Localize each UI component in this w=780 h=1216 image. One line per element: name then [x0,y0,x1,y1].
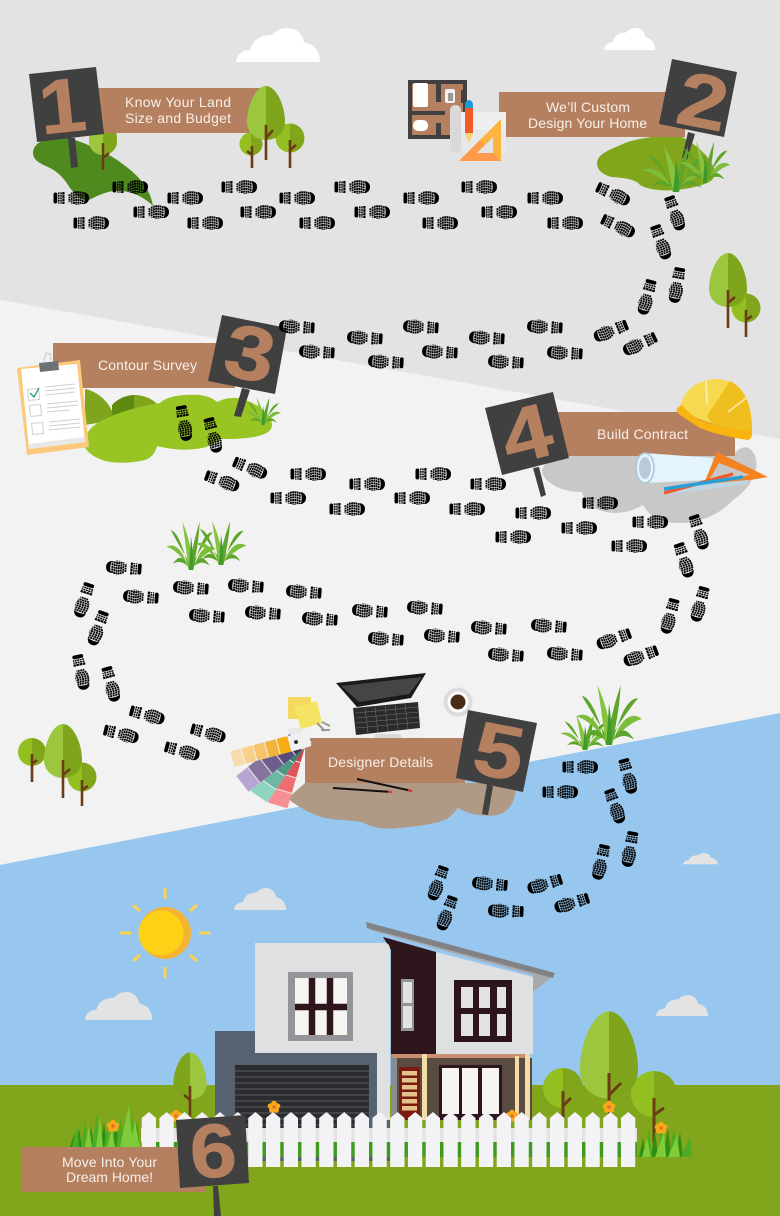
background: lawn [0,1085,780,1216]
sign 1: 1 [35,61,90,151]
grass tufts [642,142,730,192]
narrow window [401,979,414,1031]
grey ground blob 4 [542,447,756,523]
flowers behind fence [170,1101,615,1122]
left window [288,972,353,1041]
step 5 group [230,673,537,829]
brown ground blob 5 [288,783,516,829]
icon: floor plan [408,80,467,139]
right wall [436,952,533,1054]
sign post 6 [213,1186,221,1216]
tree cluster [240,86,304,168]
icon: colour swatch fan [230,726,312,808]
icon: set square and pencils [663,452,768,495]
text: step 1 title: Know Your Land [125,94,231,110]
icon: drawing tools [450,100,506,161]
footprint trail [55,180,711,932]
picket fence [141,1112,637,1167]
sign post 5 [482,784,493,815]
right window [454,980,512,1042]
text: step 2 title: We’ll Custom [546,99,630,115]
green ground blob 2 [597,136,715,190]
icon: pencils [333,779,412,792]
banner 6 [22,1147,205,1192]
banner 3 [53,343,235,388]
garage door [235,1065,369,1155]
step 3 group [17,307,287,463]
text: step 4 title: Build Contract [597,426,688,442]
icon: sun [120,888,210,978]
icon: sticky notes and clips [288,697,330,731]
icon: laptop [336,673,426,738]
porch columns [422,1054,530,1120]
icon: coffee cup [444,688,472,716]
sign 2: 2 [671,55,735,148]
green ground blob 1 [33,137,153,206]
step 4 group [485,379,768,523]
text: step 5 title: Designer Details [328,754,433,770]
banner 1 [96,88,262,133]
hills behind [85,389,158,425]
porch windows [439,1065,502,1120]
step 1 group [29,61,304,206]
clouds [85,28,717,1020]
grass tufts mid-page [167,521,642,750]
text: step 2 title: Design Your Home [528,115,647,131]
sign 3: 3 [218,307,282,400]
roof [366,922,555,992]
banner 2 [499,92,685,137]
text: step 3 title: Contour Survey [98,357,197,373]
trees beside house [173,1011,677,1143]
house [215,922,555,1161]
small tree [89,113,117,170]
grass tuft [245,397,281,425]
background: light grey zone [0,300,780,1216]
sign post 3 [234,388,250,417]
banner 5 [305,738,465,783]
sign post 4 [533,467,546,497]
flowers in grass [107,1120,667,1134]
banner 4 [555,412,735,456]
garage [215,1031,390,1161]
sign 5: 5 [467,705,531,798]
text: step 6 title: Dream Home! [66,1169,153,1185]
step 2 group [408,55,737,192]
background: sky [0,713,780,1216]
green ground blob 3 [84,395,272,463]
text: step 6 title: Move Into Your [62,1154,157,1170]
right tree cluster [709,253,760,337]
ground floor porch [392,1058,532,1120]
grass behind fence [70,1105,692,1157]
sign post 2 [682,132,695,160]
left tree cluster [18,724,96,806]
step 6 group [22,1107,249,1216]
icon: hard hat [677,379,752,440]
sign 6: 6 [187,1107,239,1195]
dark panel [383,937,436,1054]
sign 4: 4 [492,386,561,481]
icon: clipboard [17,353,89,455]
front door [399,1067,420,1120]
sign post 1 [68,138,78,168]
upper white block [255,943,390,1120]
text: step 1 title: Size and Budget [125,110,231,126]
icon: blueprint roll [636,453,713,483]
